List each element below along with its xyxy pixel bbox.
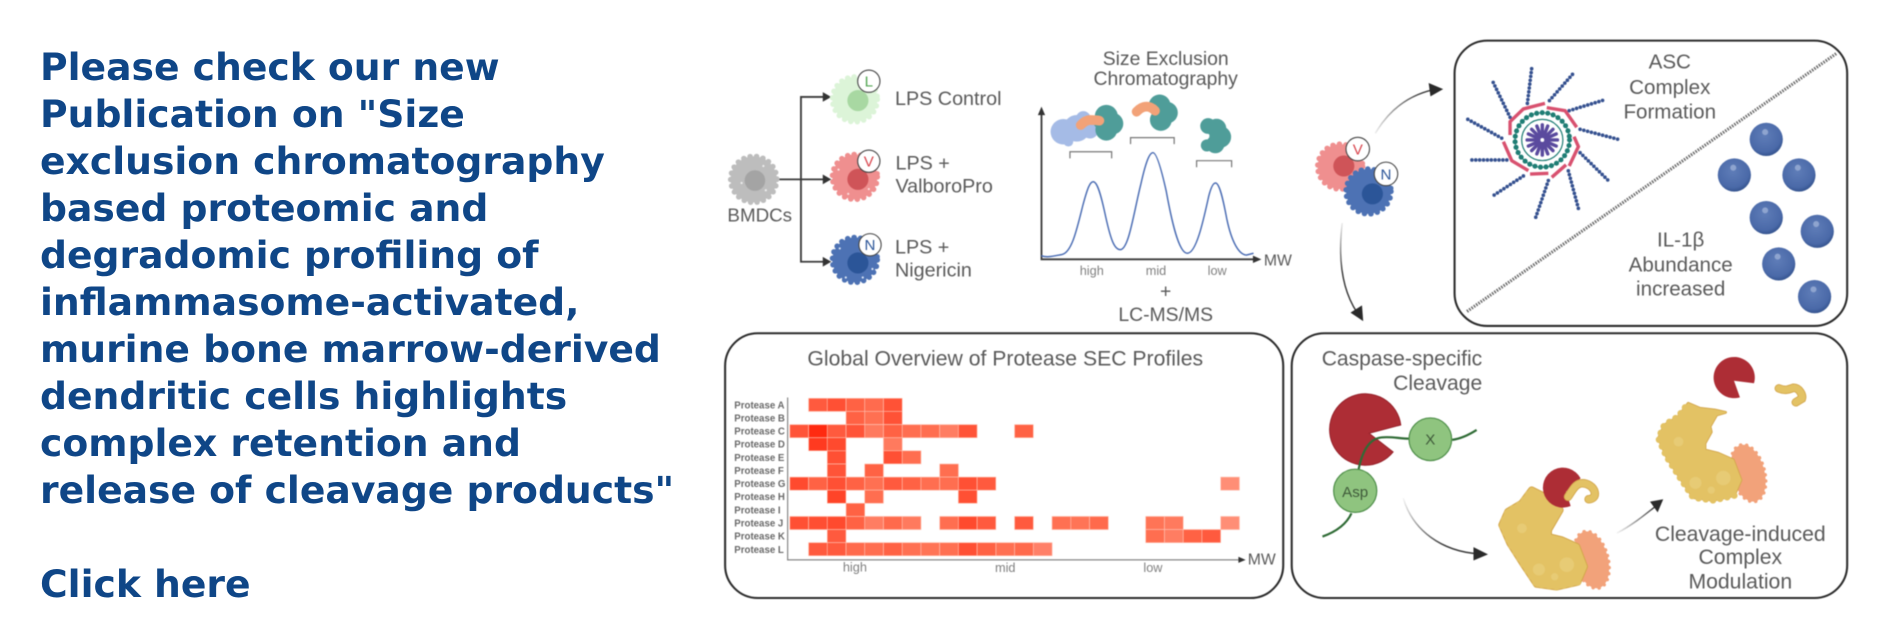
label: LPS + Nigericin: Nigericin [895, 259, 972, 281]
icon: ValboroPro and Nigericin cells: N [1381, 166, 1391, 183]
icon: caspase with peptide strand: Asp [1342, 484, 1368, 501]
row C [790, 425, 1033, 438]
heading: Size Exclusion Chromatography: Size Exclusion [1103, 48, 1229, 70]
protease labels: Protease B [734, 413, 785, 424]
arrow: to cleavage panel [1341, 223, 1363, 321]
label: + LC-MS/MS: + [1160, 280, 1171, 302]
text block: publication announcement: release of cleavage products" [40, 468, 674, 512]
icon: cleavage product fragment [1779, 388, 1802, 402]
icon: ValboroPro cell [832, 150, 880, 199]
label: LPS Control: LPS Control [895, 88, 1001, 110]
label: BMDCs: BMDCs [727, 205, 792, 226]
arrows: BMDC to treatments [779, 92, 831, 267]
protease labels: Protease F [734, 466, 784, 477]
row E [827, 451, 921, 464]
row A [809, 398, 902, 411]
heading: Caspase-specific Cleavage: Cleavage [1393, 372, 1482, 395]
protease labels: Protease C [734, 427, 785, 438]
icon: high MW protein complex [1051, 105, 1123, 147]
icon: BMDC cell [731, 156, 777, 202]
text block: publication announcement: Click here [40, 562, 251, 606]
label: LPS + Nigericin: LPS + [895, 236, 949, 258]
axis labels: low [1143, 560, 1163, 575]
text block: publication announcement: murine bone marrow-derived [40, 326, 661, 370]
icon: Nigericin cell: N [865, 237, 875, 254]
arrow: to ASC panel [1375, 83, 1443, 133]
axis labels [1080, 252, 1292, 278]
text block: publication announcement: exclusion chromatography [40, 138, 605, 182]
chart: elution curve [1041, 153, 1254, 257]
row G [790, 477, 1239, 490]
axis labels: MW [1248, 552, 1276, 569]
text block: publication announcement: dendritic cells highlights [40, 374, 567, 418]
chart axes [1038, 107, 1261, 263]
row L [809, 543, 1052, 556]
protease labels: Protease D [734, 440, 785, 451]
heading: ASC Complex Formation: Formation [1623, 100, 1716, 123]
label: LPS + Nigericin [895, 236, 972, 281]
label: LPS + ValboroPro: ValboroPro [895, 175, 993, 197]
axis labels: MW [1264, 252, 1292, 269]
icon: cleaved protein complex [1659, 403, 1771, 506]
row H [827, 490, 977, 503]
label: LPS + ValboroPro: LPS + [895, 152, 950, 174]
chart: protease heatmap [790, 398, 1239, 556]
icon: caspase with peptide strand: X [1425, 432, 1435, 449]
icon: protein complex with bound caspase [1502, 468, 1615, 592]
label: Cleavage-induced Complex Modulation: Complex [1698, 546, 1782, 569]
text block: publication announcement: degradomic profiling of [40, 232, 538, 276]
icon: ValboroPro cell: V [864, 154, 875, 171]
row K [827, 530, 1221, 543]
protease labels: Protease I [734, 505, 781, 516]
text block: publication announcement: complex retention and [40, 420, 521, 464]
row B [846, 411, 902, 425]
text block: publication announcement [40, 44, 674, 606]
label: IL-1 beta abundance increased: Abundance [1629, 253, 1733, 276]
row F [827, 464, 958, 477]
text block: publication announcement: Please check our new [40, 44, 500, 88]
row I [846, 503, 865, 516]
panel frame [725, 333, 1283, 598]
panel frame [1292, 333, 1847, 598]
icon: LPS control cell: L [865, 74, 873, 91]
heading: Size Exclusion Chromatography: Chromatography [1094, 68, 1238, 90]
icon: released caspase [1714, 357, 1755, 398]
panel frame [1455, 41, 1847, 326]
protease labels: Protease L [734, 545, 784, 556]
panel: caspase-specific cleavage [1292, 333, 1847, 598]
panel: size exclusion chromatography [1038, 48, 1292, 326]
icon: IL-1 beta spheres [1718, 123, 1834, 313]
text block: publication announcement: inflammasome-activated, [40, 280, 579, 324]
arrow: to modulation [1617, 499, 1663, 533]
axis labels: high [1080, 263, 1104, 278]
icon: mid MW protein complex [1137, 95, 1178, 131]
icon: ValboroPro and Nigericin cells [1318, 137, 1398, 214]
axis labels: high [843, 560, 867, 575]
text block: publication announcement: Publication on "Size [40, 92, 465, 136]
row D [809, 438, 902, 451]
heading: ASC Complex Formation: ASC [1649, 50, 1691, 73]
protease labels: Protease K [734, 532, 785, 543]
icon: ValboroPro and Nigericin cells: V [1353, 142, 1364, 159]
label: IL-1 beta abundance increased: increased [1636, 278, 1725, 301]
axis labels [843, 552, 1276, 575]
axis labels: mid [1146, 263, 1166, 278]
protease labels: Protease G [734, 479, 785, 490]
heading: Caspase-specific Cleavage: Caspase-specific [1322, 348, 1482, 371]
icon: LPS control cell [832, 70, 880, 122]
heading: ASC Complex Formation: Complex [1629, 76, 1711, 99]
axis labels: low [1208, 263, 1228, 278]
protease labels: Protease A [734, 400, 785, 411]
panel: ASC complex formation and IL-1 beta [1455, 41, 1847, 326]
text block: publication announcement: based proteomic and [40, 186, 488, 230]
protease labels: Protease J [734, 519, 783, 530]
icon: low MW protein [1200, 118, 1231, 153]
panel: global overview of protease SEC profiles [725, 333, 1283, 598]
label: LPS + ValboroPro [895, 152, 993, 197]
protease labels: Protease E [734, 453, 785, 464]
brackets [1070, 138, 1232, 167]
label: Cleavage-induced Complex Modulation: Modulation [1688, 570, 1792, 593]
label: IL-1 beta abundance increased: IL-1β [1657, 229, 1704, 252]
protease labels: Protease H [734, 492, 785, 503]
icon: ASC speck [1467, 65, 1618, 217]
icon: Nigericin cell [832, 234, 881, 282]
label: Cleavage-induced Complex Modulation: Cleavage-induced [1655, 523, 1826, 546]
icon: caspase with peptide strand [1322, 394, 1477, 537]
heading: Global Overview: Global Overview of Protease SEC Profiles [807, 348, 1203, 371]
panel: cell treatment workflow [727, 70, 1001, 282]
arrow: to cleavage [1403, 498, 1488, 560]
heatmap axes [788, 397, 1246, 563]
label: + LC-MS/MS: LC-MS/MS [1118, 304, 1213, 326]
protease labels [734, 400, 785, 556]
diagonal divider [1467, 53, 1837, 311]
axis labels: mid [995, 560, 1016, 575]
row J [790, 516, 1239, 530]
